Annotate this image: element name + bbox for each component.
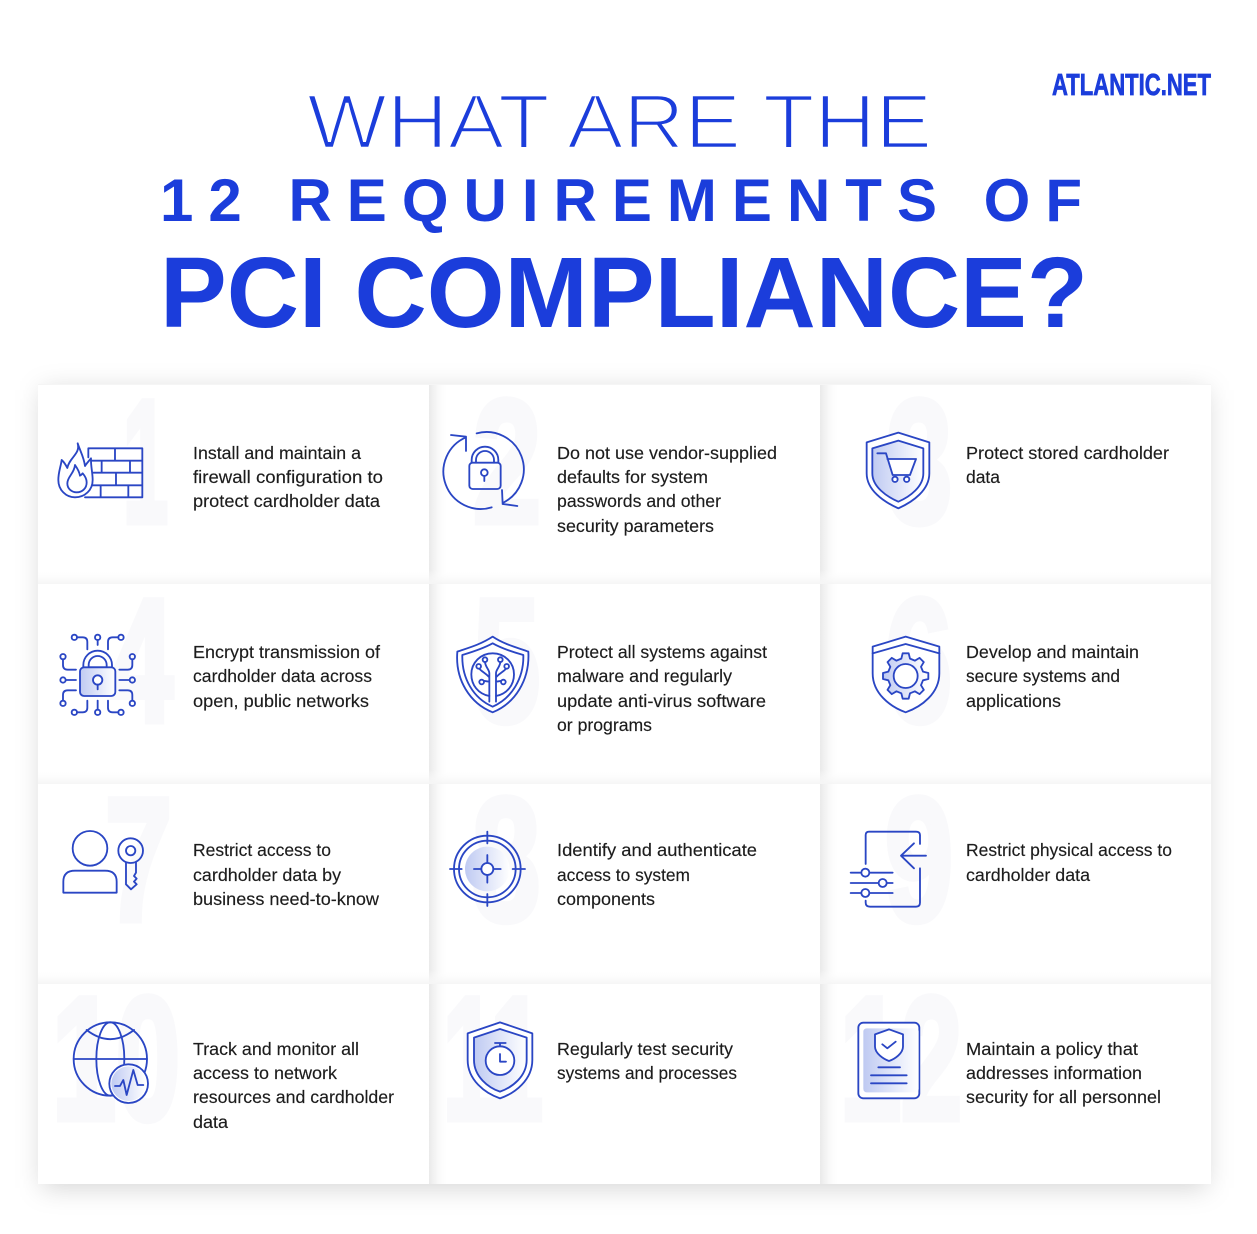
panel: requirement 6 xyxy=(873,564,1139,759)
panel: requirement 8: 8 xyxy=(472,763,540,958)
text: Regularly test security xyxy=(557,1039,733,1059)
text: access to network xyxy=(193,1063,337,1083)
text: security parameters xyxy=(557,516,714,536)
text: access to system xyxy=(557,865,690,885)
text xyxy=(557,642,767,735)
icon: circuit padlock xyxy=(60,635,135,715)
panel: requirement 7: 7 xyxy=(105,763,172,958)
icon: door entry with sliders xyxy=(851,832,926,907)
text xyxy=(557,443,777,536)
panel: requirement 12: 12 xyxy=(840,962,962,1157)
text: Identify and authenticate xyxy=(557,840,757,860)
text: malware and regularly xyxy=(557,666,732,686)
panel: requirement 6: 6 xyxy=(885,564,952,759)
text xyxy=(966,840,1172,885)
text: Protect stored cardholder xyxy=(966,443,1169,463)
title: 12 REQUIREMENTS OF xyxy=(160,167,1082,234)
text xyxy=(966,443,1169,487)
panel: requirement 3 xyxy=(867,365,1169,560)
panel: requirement 2: 2 xyxy=(473,365,541,560)
text: Do not use vendor-supplied xyxy=(557,443,777,463)
panel: requirement 10: 10 xyxy=(52,962,180,1157)
text: Protect all systems against xyxy=(557,642,767,662)
panel: requirement 2 xyxy=(443,365,777,560)
text: components xyxy=(557,889,655,909)
text: firewall configuration to xyxy=(193,467,383,487)
icon: lock with rotating arrows xyxy=(443,432,524,509)
icon: shield with gear xyxy=(873,637,939,712)
text: business need-to-know xyxy=(193,889,379,909)
icon: shield with stopwatch xyxy=(468,1022,532,1098)
panel: requirement 9: 9 xyxy=(885,763,953,958)
icon: globe with pulse xyxy=(74,1022,148,1103)
panel: requirement 3: 3 xyxy=(887,365,952,560)
panel: requirement 5: 5 xyxy=(473,564,540,759)
icon: person and key xyxy=(63,831,143,893)
panel: requirement 1: 1 xyxy=(123,365,168,560)
text xyxy=(193,443,383,511)
panel: requirement 1 xyxy=(58,365,383,560)
text: addresses information xyxy=(966,1063,1142,1083)
panel: requirement 7 xyxy=(63,763,379,958)
panel: requirement 4 xyxy=(60,564,380,759)
title: PCI COMPLIANCE? xyxy=(160,237,1088,349)
text: open, public networks xyxy=(193,691,369,711)
text: resources and cardholder xyxy=(193,1087,394,1107)
text: data xyxy=(966,467,1000,487)
text: Restrict access to xyxy=(193,840,331,860)
text: cardholder data by xyxy=(193,865,341,885)
text: passwords and other xyxy=(557,491,721,511)
text: Encrypt transmission of xyxy=(193,642,380,662)
text: cardholder data across xyxy=(193,666,372,686)
text: applications xyxy=(966,691,1061,711)
text: update anti-virus software xyxy=(557,691,766,711)
panel: requirement 4: 4 xyxy=(110,564,173,759)
panel: requirement 5 xyxy=(457,564,767,759)
panel: requirement 8 xyxy=(450,763,757,958)
text xyxy=(193,642,380,711)
panel: requirement 9 xyxy=(851,763,1172,958)
text: Maintain a policy that xyxy=(966,1039,1138,1059)
panel: requirement 11: 11 xyxy=(443,962,543,1157)
panel: requirement 10 xyxy=(52,962,394,1157)
title: WHAT ARE THE xyxy=(307,79,932,165)
title xyxy=(160,79,1088,349)
text: protect cardholder data xyxy=(193,491,380,511)
icon: shield with cart xyxy=(867,433,929,508)
text: or programs xyxy=(557,715,652,735)
text: secure systems and xyxy=(966,666,1120,686)
icon: firewall xyxy=(58,443,142,497)
text: Develop and maintain xyxy=(966,642,1139,662)
text: Track and monitor all xyxy=(193,1039,359,1059)
panel: requirement 11 xyxy=(443,962,737,1157)
text: Install and maintain a xyxy=(193,443,361,463)
text: data xyxy=(193,1112,228,1132)
text xyxy=(557,1039,737,1083)
panel: requirement 12 xyxy=(840,962,1161,1157)
text xyxy=(193,840,379,909)
text xyxy=(966,642,1139,711)
text: cardholder data xyxy=(966,865,1090,885)
icon: target xyxy=(450,832,525,906)
icon: policy document with shield xyxy=(858,1023,919,1098)
card grid shadow xyxy=(42,390,1207,1188)
icon: shield with circuit brain xyxy=(457,637,528,712)
text xyxy=(966,1039,1161,1107)
text: security for all personnel xyxy=(966,1087,1161,1107)
text: systems and processes xyxy=(557,1063,737,1083)
text xyxy=(557,840,757,909)
text: Restrict physical access to xyxy=(966,840,1172,860)
text xyxy=(193,1039,394,1132)
text: defaults for system xyxy=(557,467,708,487)
